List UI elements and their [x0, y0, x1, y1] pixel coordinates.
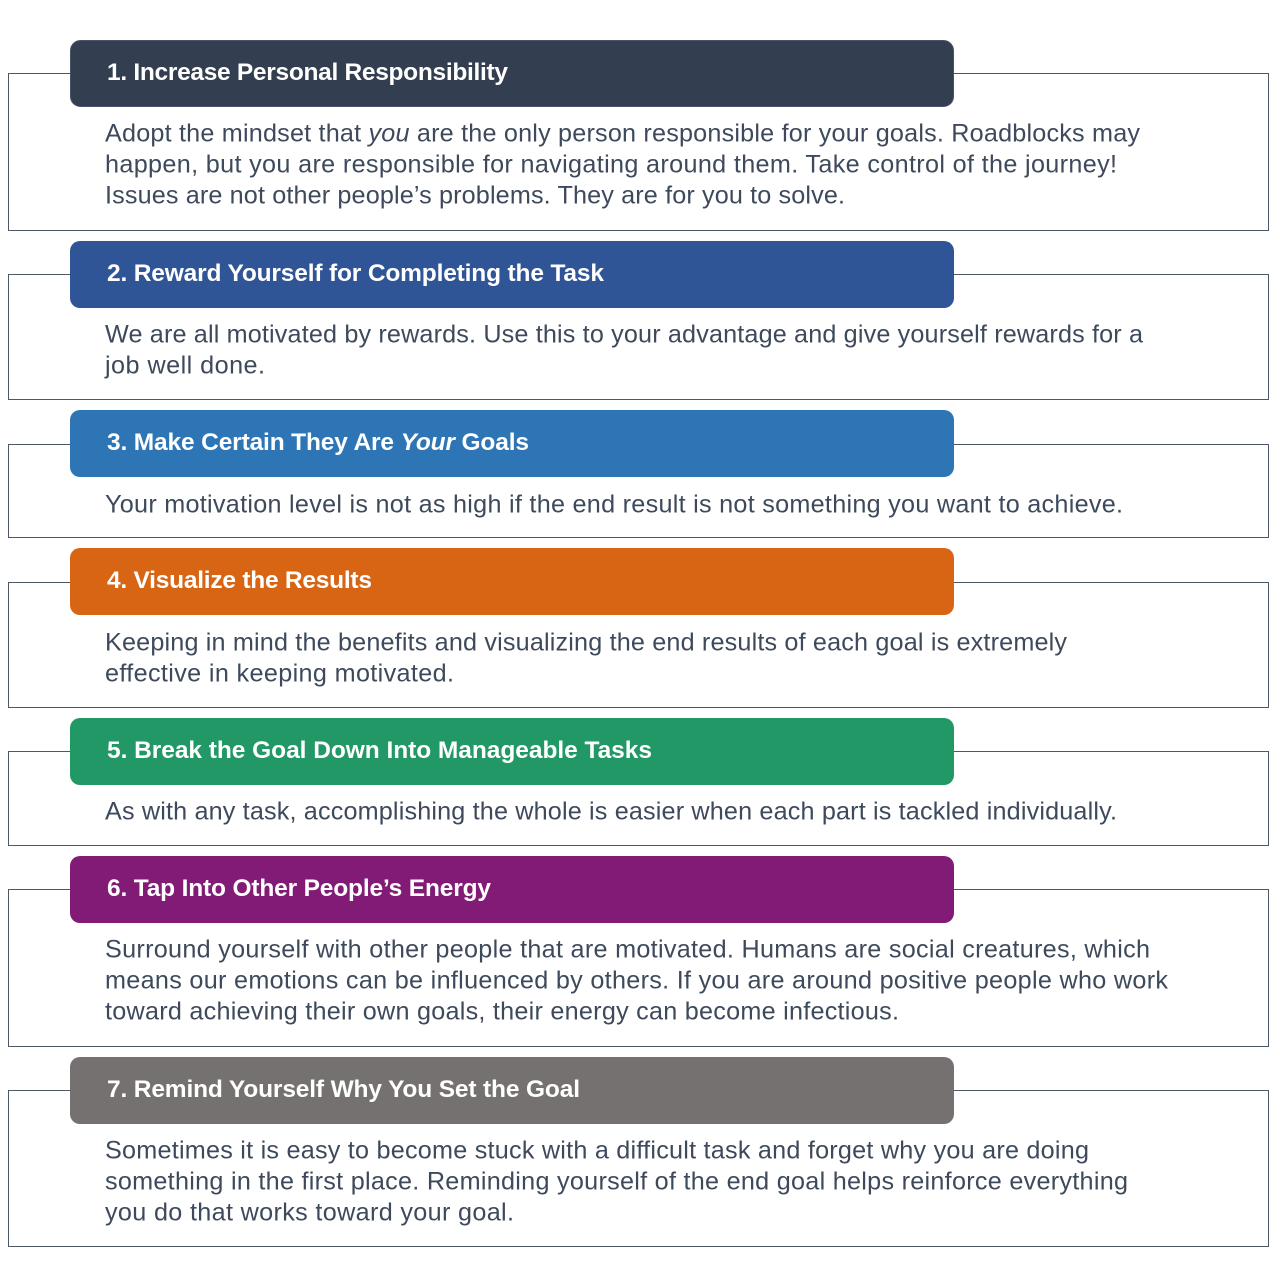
panel outline 4	[8, 582, 1268, 708]
panel: 5 Break the Goal	[8, 718, 1268, 846]
panel: 3 Make Certain	[8, 410, 1268, 538]
body text 2	[104, 320, 1144, 380]
body text 6: toward achieving their own goals, their energy can become infectious.	[105, 998, 899, 1026]
header bar 6	[70, 856, 954, 923]
panel: 4 Visualize	[8, 548, 1268, 708]
panel: 6 Tap Into Energy	[8, 856, 1268, 1046]
header bar 3	[70, 410, 954, 477]
panel outline 1	[8, 74, 1268, 230]
panel outline 3	[8, 444, 1268, 538]
body text 5: As with any task, accomplishing the whole is easier when each part is tackled individually.	[105, 798, 1117, 826]
body text 4: effective in keeping motivated.	[105, 660, 454, 688]
header bar 5	[70, 718, 954, 785]
body text 1	[105, 120, 1140, 210]
heading 5: 5. Break the Goal Down Into Manageable Tasks	[107, 737, 652, 764]
heading 6: 6. Tap Into Other People’s Energy	[107, 875, 491, 902]
body text 7	[105, 1136, 1128, 1226]
panel: 2 Reward Yourself	[8, 241, 1268, 400]
heading 7: 7. Remind Yourself Why You Set the Goal	[107, 1076, 580, 1103]
body text 2: We are all motivated by rewards. Use this to your advantage and give yourself rewards for a	[105, 320, 1144, 348]
header bar 4	[70, 548, 954, 615]
panel: 7 Remind Yourself	[8, 1057, 1268, 1246]
body text 4: Keeping in mind the benefits and visualizing the end results of each goal is extremely	[105, 628, 1067, 656]
body text 7: Sometimes it is easy to become stuck with a difficult task and forget why you are doing	[105, 1136, 1089, 1164]
body text 7: something in the first place. Reminding yourself of the end goal helps reinforce everything	[105, 1168, 1128, 1196]
body text 7: you do that works toward your goal.	[105, 1198, 514, 1226]
body text 1: happen, but you are responsible for navigating around them. Take control of the journey!	[105, 150, 1117, 178]
body text 3: Your motivation level is not as high if the end result is not something you want to achieve.	[105, 490, 1123, 518]
body text 1: Adopt the mindset that you are the only person responsible for your goals. Roadblocks may	[105, 120, 1140, 148]
header bar 7	[70, 1057, 954, 1124]
panel outline 7	[8, 1090, 1268, 1246]
body text 2: job well done.	[104, 352, 265, 380]
heading 2: 2. Reward Yourself for Completing the Task	[107, 260, 604, 287]
body text 4	[105, 628, 1067, 688]
heading 1: 1. Increase Personal Responsibility	[107, 59, 508, 86]
body text 6: Surround yourself with other people that are motivated. Humans are social creatures, which	[105, 936, 1150, 964]
heading 3: 3. Make Certain They Are Your Goals	[107, 429, 529, 456]
body text 1: Issues are not other people’s problems. They are for you to solve.	[105, 182, 845, 210]
panel: 1 Increase Personal Responsibility	[8, 40, 1268, 230]
body text 6: means our emotions can be influenced by others. If you are around positive people who work	[105, 966, 1168, 994]
header bar 1	[70, 40, 954, 106]
header bar 2	[70, 241, 954, 308]
panel outline 6	[8, 890, 1268, 1046]
panel outline 2	[8, 274, 1268, 400]
body text 6	[105, 936, 1168, 1026]
panel outline 5	[8, 752, 1268, 846]
heading 4: 4. Visualize the Results	[107, 567, 372, 594]
